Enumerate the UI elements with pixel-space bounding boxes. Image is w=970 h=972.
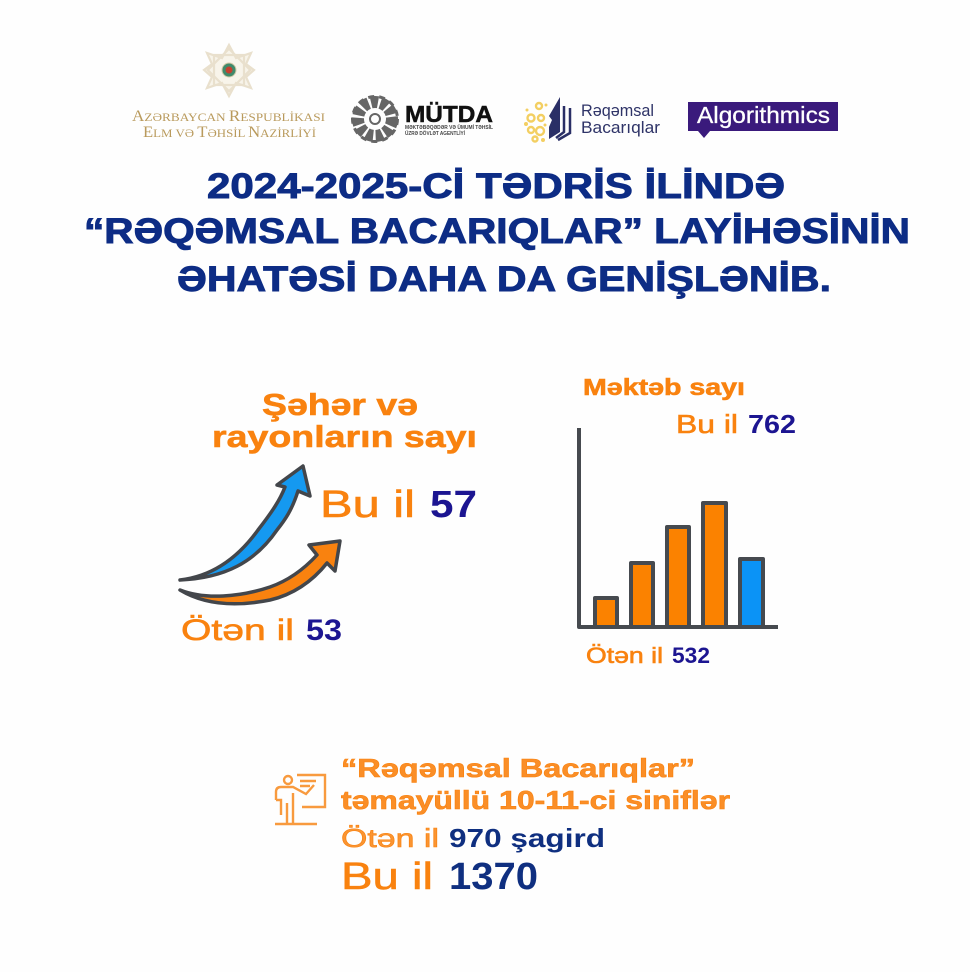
title: ƏHATƏSİ DAHA DA GENİŞLƏNİB. (177, 260, 831, 299)
stat: last year 53 (181, 614, 342, 647)
icon: ministry emblem (204, 45, 254, 96)
stat: this year 762: 762 (748, 409, 796, 439)
heading: specialised classes (341, 753, 730, 815)
icon: teacher at board (275, 775, 325, 824)
MÜTDA subtitle: ÜZRƏ DÖVLƏT AGENTLİYİ (405, 130, 465, 137)
stat: last year 532: 532 (672, 643, 710, 668)
heading: cities and districts count (212, 387, 477, 454)
panel: cities and districts (180, 387, 477, 647)
heading: cities and districts count: Şəhər və (262, 387, 418, 422)
ministry name: AZƏRBAYCAN RESPUBLİKASI (132, 108, 325, 125)
icon: golden dots and book head (524, 97, 570, 142)
icon: blue growth arrow (180, 466, 310, 580)
logo: Rəqəmsal Bacarıqlar (524, 97, 661, 142)
stat: this year 57 (320, 484, 477, 526)
stat: last year 53: Ötən il (181, 614, 294, 647)
stat: last year 53: 53 (306, 614, 342, 647)
Rəqəmsal Bacarıqlar wordmark: Rəqəmsal (581, 102, 654, 120)
stat: last year 970 students: 970 şagird (449, 823, 605, 853)
stat: this year 1370: Bu il (341, 856, 433, 898)
heading: school count: Məktəb sayı (583, 374, 745, 400)
heading: specialised classes: “Rəqəmsal Bacarıqlar” (341, 753, 695, 783)
ministry name: ELM VƏ TƏHSİL NAZİRLİYİ (143, 124, 316, 141)
icon: MÜTDA emblem (352, 96, 398, 142)
stat: last year 532 (586, 643, 710, 668)
title: 2024-2025-Cİ TƏDRİS İLİNDƏ (207, 167, 785, 206)
stat: last year 970 students: Ötən il (341, 823, 439, 853)
title: “RƏQƏMSAL BACARIQLAR” LAYİHƏSİNİN (84, 212, 910, 251)
title (84, 167, 910, 299)
logo: Algorithmics (688, 102, 838, 138)
MÜTDA wordmark: MÜTDA (405, 101, 493, 127)
panel: school count (579, 374, 796, 668)
Rəqəmsal Bacarıqlar wordmark (581, 102, 661, 137)
panel: specialised classes (275, 753, 730, 898)
stat: last year 970 students (341, 823, 605, 853)
stat: this year 762 (676, 409, 796, 439)
stat: this year 57: 57 (430, 484, 477, 526)
bar chart (579, 428, 778, 627)
logo: Algorithmics: Algorithmics (697, 102, 830, 128)
heading: cities and districts count: rayonların sayı (212, 419, 477, 454)
icon: orange growth arrow (180, 541, 340, 604)
stat: last year 532: Ötən il (586, 643, 663, 668)
stat: this year 762: Bu il (676, 409, 738, 439)
logo: ministry of science and education (132, 45, 325, 141)
ministry name (132, 108, 325, 141)
stat: this year 57: Bu il (320, 484, 415, 526)
stat: this year 1370: 1370 (449, 856, 538, 898)
logo: MÜTDA (352, 96, 494, 142)
MÜTDA subtitle: MƏKTƏBƏQƏDƏR VƏ ÜMUMİ TƏHSİL (405, 124, 494, 131)
MÜTDA subtitle (405, 124, 494, 137)
stat: this year 1370 (341, 856, 538, 898)
Rəqəmsal Bacarıqlar wordmark: Bacarıqlar (581, 119, 661, 137)
heading: specialised classes: təmayüllü 10-11-ci siniflər (341, 785, 730, 815)
